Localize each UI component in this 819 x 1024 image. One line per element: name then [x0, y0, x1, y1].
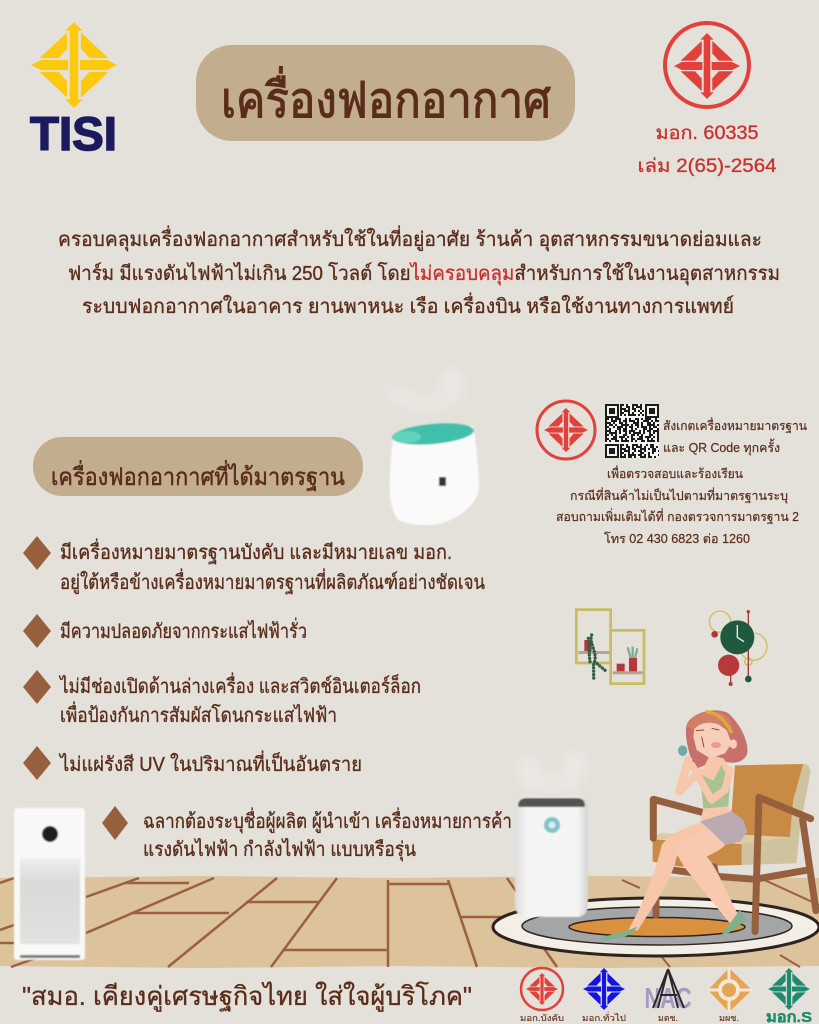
subheading pill: เครื่องฟอกอากาศที่ได้มาตรฐาน	[51, 460, 345, 491]
far leg	[628, 822, 717, 931]
bullet: mandatory mark: อยู่ใต้หรือข้างเครื่องหมายมาตรฐานที่ผลิตภัณฑ์อย่างชัดเจน	[60, 568, 485, 595]
complaint information text: สอบถามเพิ่มเติมได้ที่ กองตรวจการมาตรฐาน 2	[556, 508, 799, 524]
footer: mandatory mark	[520, 968, 564, 1023]
footer: general mark	[582, 968, 626, 1023]
logo: TISI: TISI	[30, 107, 117, 160]
title pill	[196, 45, 575, 141]
QR code	[605, 404, 659, 458]
arms	[679, 760, 730, 800]
waist	[700, 807, 731, 822]
footer: NAC mark: NAC	[644, 983, 692, 1015]
scope paragraph	[58, 225, 780, 318]
bullet: leakage safety: มีความปลอดภัยจากกระแสไฟฟ้ารั่ว	[60, 617, 307, 643]
complaint information text: กรณีที่สินค้าไม่เป็นไปตามที่มาตรฐานระบุ	[570, 487, 788, 504]
bullet: mandatory mark: มีเครื่องหมายมาตรฐานบังคับ และมีหมายเลข มอก.	[60, 538, 452, 564]
scope paragraph: ครอบคลุมเครื่องฟอกอากาศสำหรับใช้ในที่อยู่อาศัย ร้านค้า อุตสาหกรรมขนาดย่อมและ	[58, 225, 762, 252]
standard mark and number	[638, 23, 777, 177]
footer: general mark: มอก.ทั่วไป	[582, 1011, 626, 1023]
neck and chest	[700, 755, 732, 790]
near shoe	[720, 910, 747, 937]
far shoe	[600, 927, 637, 940]
tall air purifier	[14, 808, 85, 960]
bullet: no bottom opening: เพื่อป้องกันการสัมผัสโดนกระแสไฟฟ้า	[60, 701, 337, 727]
bullet: UV	[23, 746, 362, 780]
footer: mandatory mark: มอก.บังคับ	[520, 1013, 564, 1023]
hair	[686, 710, 747, 770]
near leg	[676, 831, 740, 925]
wall clock	[709, 610, 767, 686]
verification mark	[537, 401, 595, 459]
bullet: label: แรงดันไฟฟ้า กำลังไฟฟ้า แบบหรือรุ่น	[143, 838, 416, 862]
bullet: no bottom opening	[23, 670, 421, 727]
top	[700, 765, 730, 809]
bullet: leakage safety	[23, 614, 307, 648]
armchair	[653, 764, 816, 932]
floor	[0, 876, 819, 968]
bullet: label	[102, 806, 512, 862]
small air purifier with steam	[386, 367, 479, 525]
standard mark and number: มอก. 60335	[656, 123, 758, 144]
face	[693, 718, 732, 758]
complaint information text	[556, 417, 807, 546]
footer: S mark	[766, 968, 812, 1024]
floor air purifier with steam	[515, 751, 588, 917]
complaint information text: และ QR Code ทุกครั้ง	[663, 438, 780, 456]
wall shelves with plants	[576, 610, 644, 684]
footer: community standard mark: มผช.	[719, 1013, 739, 1023]
slogan: "สมอ. เคียงคู่เศรษฐกิจไทย ใส่ใจผู้บริโภค"	[22, 981, 472, 1012]
footer: NAC mark	[644, 969, 692, 1023]
complaint information text: เพื่อตรวจสอบและร้องเรียน	[607, 465, 743, 481]
complaint information text: โทร 02 430 6823 ต่อ 1260	[604, 531, 750, 546]
footer: community standard mark	[708, 968, 752, 1023]
complaint information text: สังเกตเครื่องหมายมาตรฐาน	[663, 417, 807, 433]
bullet: no bottom opening: ไม่มีช่องเปิดด้านล่างเครื่อง และสวิตช์อินเตอร์ล็อก	[58, 672, 421, 698]
rug	[493, 898, 819, 956]
title pill: เครื่องฟอกอากาศ	[221, 66, 551, 128]
standard mark and number: เล่ม 2(65)-2564	[638, 156, 777, 177]
bullet: label: ฉลากต้องระบุชื่อผู้ผลิต ผู้นำเข้า เครื่องหมายการค้า	[143, 807, 512, 834]
bullet: mandatory mark	[23, 536, 485, 595]
scope paragraph: ระบบฟอกอากาศในอาคาร ยานพาหนะ เรือ เครื่องบิน หรือใช้งานทางการแพทย์	[82, 292, 734, 318]
bullet: UV: ไม่แผ่รังสี UV ในปริมาณที่เป็นอันตราย	[58, 750, 362, 776]
woman in armchair	[600, 710, 816, 940]
compact mirror	[678, 745, 687, 756]
logo: TISI	[30, 22, 117, 160]
shorts	[700, 810, 747, 845]
subheading pill	[33, 437, 363, 496]
footer: NAC mark: มตช.	[658, 1013, 678, 1023]
scope paragraph: ฟาร์ม มีแรงดันไฟฟ้าไม่เกิน 250 โวลต์ โดยไม่ครอบคลุมสำหรับการใช้ในงานอุตสาหกรรม	[68, 262, 780, 286]
